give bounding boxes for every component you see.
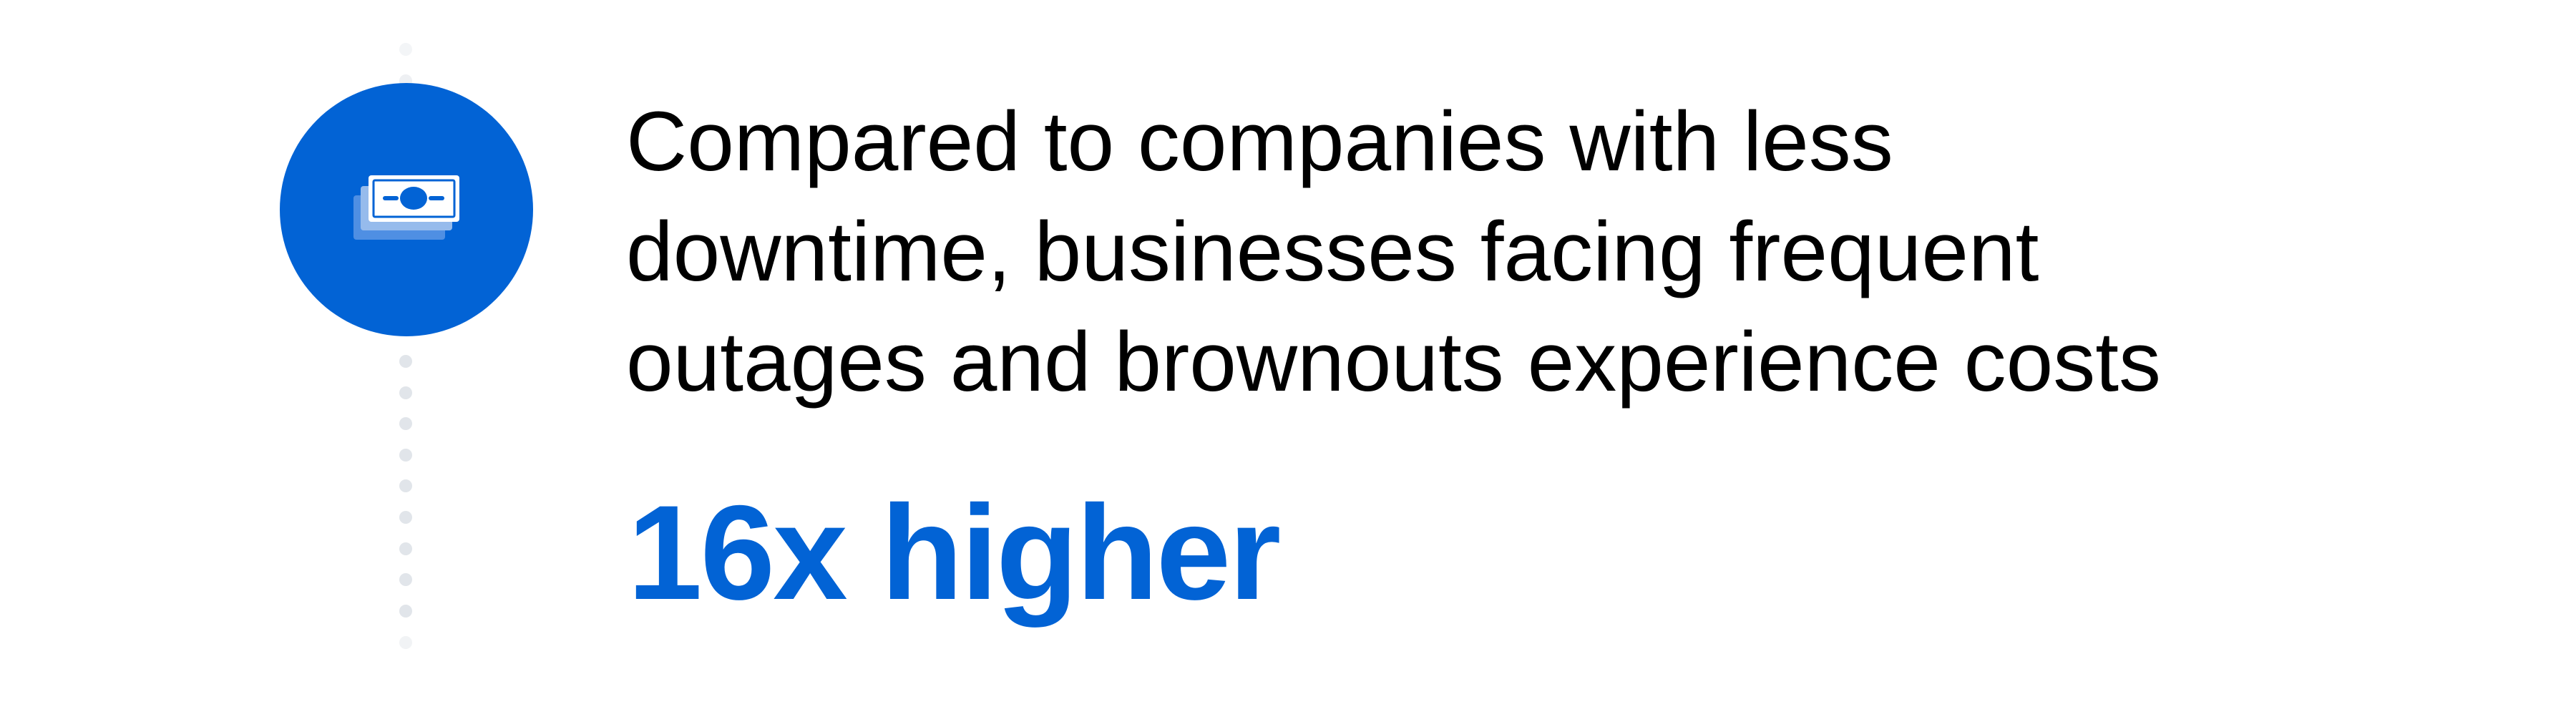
- text block: description: outages and brownouts experience costs: [626, 315, 2161, 409]
- text block: description: [626, 94, 2161, 409]
- text block: description: Compared to companies with less: [626, 94, 1893, 189]
- icon circle: money: [280, 83, 533, 336]
- text block: description: downtime, businesses facing frequent: [626, 205, 2039, 299]
- highlight stat: 16x higher: [628, 477, 1279, 628]
- icon: banknotes: [353, 175, 459, 240]
